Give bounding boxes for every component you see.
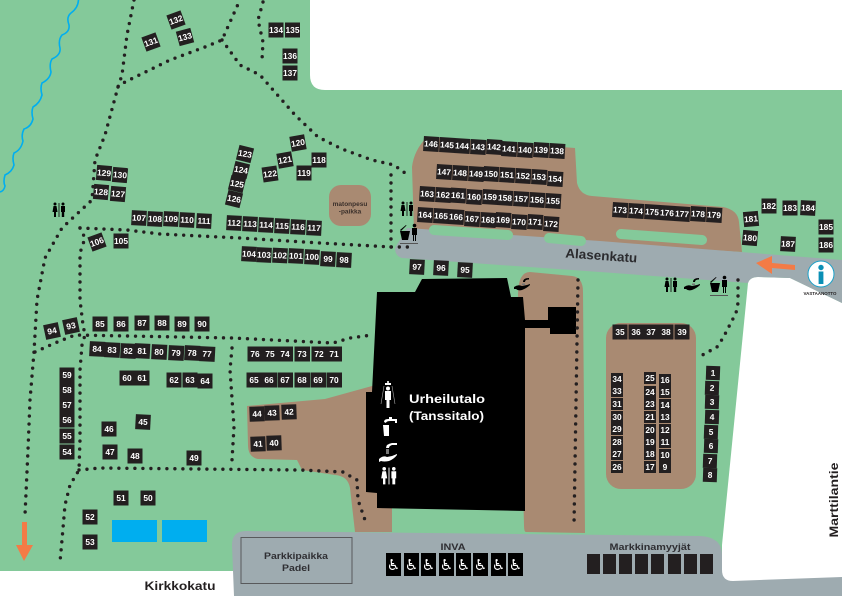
- pitches 131-133: 133: [177, 30, 193, 43]
- pitches 107-117: 111: [197, 215, 211, 226]
- pitches 155-163: 158: [498, 192, 513, 203]
- label: matonpesupaikka: -paikka: [339, 208, 362, 216]
- pitches 77-84: [89, 341, 215, 362]
- pitches 45-49: 49: [189, 453, 199, 463]
- pitches 155-163: 161: [451, 190, 466, 201]
- pitches 147-154: 153: [532, 171, 547, 182]
- brown area: west of sports hall: [247, 386, 392, 532]
- pitches 107-117: 116: [291, 221, 305, 232]
- icon: information: [808, 261, 834, 287]
- pitches 98-104: [241, 246, 352, 268]
- pitches 105-106: [87, 232, 128, 252]
- pitches 134-137: 137: [283, 68, 297, 78]
- pitches 123-126: 126: [226, 193, 242, 205]
- pitches 123-126: 125: [229, 178, 245, 190]
- pitches 131-133: 131: [143, 35, 160, 49]
- pitches 71-76: 72: [314, 349, 324, 359]
- pitches 54-59: 57: [62, 400, 72, 410]
- pitches 54-59: 56: [62, 415, 72, 425]
- pitches 98-104: 99: [323, 254, 333, 264]
- pitches 107-117: 113: [243, 218, 257, 229]
- pitches 1-8: 5: [708, 427, 714, 437]
- pitches 180-187: 183: [783, 203, 797, 213]
- pitches 26-34: 27: [612, 449, 622, 459]
- brown area: matonpesupaikka: [329, 185, 371, 226]
- box: Parkkipaikka Padel: [241, 538, 352, 584]
- pitches 147-154: [436, 164, 563, 187]
- pitches 40-44: 44: [252, 409, 262, 419]
- pitches 180-187: 186: [819, 240, 833, 250]
- icon: shower: [381, 381, 395, 408]
- pitches 180-187: [742, 198, 834, 252]
- pitches 118-122: 122: [262, 168, 278, 180]
- brown area: south-east pitches: [606, 323, 696, 489]
- pitches 26-34: 34: [612, 374, 622, 384]
- pitches 180-187: 185: [819, 222, 833, 232]
- pitches 1-8: 8: [707, 470, 713, 480]
- pitches 45-49: 47: [105, 447, 115, 457]
- pitches 147-154: 151: [500, 169, 515, 180]
- accessible parking spaces: ♿: [405, 556, 418, 574]
- pitches 107-117: 117: [307, 222, 321, 233]
- pitches 35-39: 39: [677, 327, 687, 337]
- pitches 71-76: [248, 346, 342, 362]
- pitches 54-59: 54: [62, 447, 72, 457]
- icon: toilets white: [381, 467, 396, 484]
- pitches 164-172: 165: [434, 210, 449, 221]
- pitches 98-104: 100: [305, 251, 320, 262]
- pitches 134-137: 134: [269, 25, 283, 35]
- accessible parking spaces: [386, 553, 523, 576]
- pitches 85-90: [92, 316, 210, 332]
- icon: hand washing east: [684, 278, 700, 290]
- pitches 71-76: 73: [297, 349, 307, 359]
- pitches 180-187: 184: [801, 202, 816, 213]
- pitches 26-34: 30: [612, 412, 622, 422]
- accessible parking spaces: ♿: [474, 556, 487, 574]
- pitches 138-146: 138: [550, 145, 565, 156]
- white area: top right: [310, 0, 842, 90]
- label: Kirkkokatu: Kirkkokatu: [144, 579, 216, 593]
- pitches 9-16: 9: [663, 462, 668, 472]
- pitches 50-53: 51: [116, 493, 126, 503]
- pitches 95-97: 95: [460, 265, 470, 275]
- accessible parking spaces: ♿: [492, 556, 505, 574]
- box: Parkkipaikka Padel: Padel: [282, 563, 310, 574]
- pitches 50-53: 52: [85, 512, 95, 522]
- pitches 147-154: 147: [437, 166, 452, 177]
- pitches 71-76: 76: [250, 349, 260, 359]
- pitches 35-39: 37: [646, 327, 656, 337]
- pitches 85-90: 86: [116, 319, 126, 329]
- pitches 35-39: 35: [615, 327, 625, 337]
- pitches 95-97: [409, 259, 473, 278]
- pitches 164-172: [417, 207, 559, 232]
- pitches 17-25: 19: [645, 437, 655, 447]
- pitches 173-179: 177: [675, 208, 690, 219]
- pitches 107-117: 114: [259, 219, 273, 230]
- pitches 9-16: 14: [660, 400, 670, 410]
- pitches 9-16: 13: [660, 412, 670, 422]
- pitches 147-154: 150: [484, 168, 499, 179]
- pitches 1-8: 2: [709, 383, 715, 393]
- label: vastaanotto: VASTAANOTTO: [804, 291, 837, 296]
- green islands in road edge: [434, 230, 702, 241]
- pitches 40-44: [249, 404, 297, 452]
- label: INVA: INVA: [440, 542, 466, 553]
- pitches 131-133: 132: [168, 13, 185, 27]
- pitches 40-44: 41: [253, 439, 263, 449]
- arrow: south exit: [16, 522, 33, 561]
- pitches 127-130: [93, 165, 128, 202]
- pitches 118-122: 118: [312, 155, 326, 165]
- pitches 93-94: 93: [65, 320, 77, 332]
- accessible parking spaces: ♿: [509, 556, 522, 574]
- pitches 26-34: 28: [612, 437, 622, 447]
- brown market area: north: [412, 137, 742, 252]
- pitches 60-64: 61: [137, 373, 147, 383]
- pitches 50-53: [82, 490, 156, 550]
- pitches 138-146: 146: [424, 138, 439, 149]
- road: Alasenkatu: [395, 228, 842, 303]
- pitches 60-64: [120, 370, 212, 388]
- icon: toilets east: [664, 278, 677, 292]
- pitches 45-49: 46: [104, 424, 114, 434]
- pitches 17-25: 23: [645, 399, 655, 409]
- pitches 164-172: 164: [418, 209, 433, 220]
- accessible parking spaces: ♿: [422, 556, 435, 574]
- pitches 45-49: 48: [130, 451, 140, 461]
- pitches 9-16: 11: [661, 437, 670, 447]
- pitches 77-84: 78: [187, 348, 197, 358]
- pitches 77-84: 81: [137, 346, 147, 356]
- pitches 1-8: 3: [709, 397, 715, 407]
- pitches 65-70: 70: [329, 375, 339, 385]
- pitches 164-172: 171: [528, 216, 543, 227]
- pitches 155-163: 156: [530, 194, 545, 205]
- pitches 40-44: 40: [269, 438, 279, 448]
- accessible parking spaces: ♿: [457, 556, 470, 574]
- pitches 107-117: 109: [164, 213, 179, 224]
- pitches 77-84: 83: [107, 345, 117, 355]
- pitches 123-126: 124: [233, 164, 249, 176]
- pitches 98-104: 101: [289, 250, 304, 261]
- pitches 17-25: 20: [645, 425, 655, 435]
- pitches 95-97: 96: [436, 263, 446, 273]
- pitches 107-117: 110: [180, 214, 194, 225]
- pitches 60-64: 64: [200, 376, 210, 386]
- icon: recycling point market: [400, 224, 418, 244]
- pitches 180-187: 180: [743, 232, 758, 243]
- pitches 60-64: 60: [122, 373, 132, 383]
- pitches 1-8: 7: [707, 456, 713, 466]
- pitches 60-64: 63: [185, 375, 195, 385]
- pitches 147-154: 152: [516, 170, 531, 181]
- white area: right side: [722, 277, 842, 581]
- pitches 127-130: 127: [111, 188, 126, 199]
- label: Markkinamyyjät: Markkinamyyjät: [610, 542, 691, 553]
- pitches 65-70: 65: [249, 375, 259, 385]
- pitches 164-172: 170: [512, 216, 527, 227]
- pitches 65-70: 69: [313, 375, 323, 385]
- arrow: east entrance: [756, 256, 795, 274]
- pitches 138-146: 145: [440, 139, 455, 150]
- icon: toilets market: [400, 202, 413, 216]
- pitches 164-172: 167: [465, 213, 480, 224]
- pitches 173-179: [612, 202, 722, 223]
- pitches 77-84: 80: [154, 347, 164, 357]
- accessible parking spaces: ♿: [440, 556, 453, 574]
- pitches 134-137: 135: [286, 25, 300, 35]
- pitches 138-146: 143: [471, 141, 486, 152]
- box: Parkkipaikka Padel: Parkkipaikka: [264, 551, 329, 562]
- pitches 123-126: [225, 145, 254, 208]
- pitches 77-84: 82: [123, 346, 133, 356]
- pitches 54-59: [60, 368, 74, 460]
- pitches 164-172: 169: [496, 214, 511, 225]
- pitches 173-179: 174: [629, 205, 644, 216]
- pitches 85-90: 89: [177, 319, 187, 329]
- pitches 1-8: 6: [708, 441, 714, 451]
- market vendor parking spaces: [587, 554, 713, 574]
- pitches 35-39: 38: [661, 327, 671, 337]
- pitches 138-146: 144: [455, 140, 470, 151]
- pitches 107-117: 108: [148, 213, 163, 224]
- pitches 71-76: 74: [280, 349, 290, 359]
- pitches 173-179: 173: [613, 204, 628, 215]
- pitches 107-117: 107: [132, 212, 147, 223]
- pitches 71-76: 71: [329, 349, 339, 359]
- parking area: [232, 531, 842, 596]
- pitches 85-90: 88: [157, 318, 167, 328]
- pitches 40-44: 42: [284, 407, 294, 417]
- pitches 17-25: 18: [645, 449, 655, 459]
- pitches 138-146: [423, 136, 565, 159]
- pitches 127-130: 128: [94, 186, 109, 197]
- pitches 105-106: 106: [89, 235, 106, 249]
- pitches 155-163: 160: [467, 191, 482, 202]
- pitches 173-179: 178: [691, 208, 706, 219]
- pitches 60-64: 62: [169, 375, 179, 385]
- accessible parking spaces: ♿: [387, 556, 400, 574]
- pitches 164-172: 168: [481, 214, 496, 225]
- icon: toilets west: [52, 202, 65, 217]
- pitches 9-16: 10: [660, 450, 670, 460]
- pitches 9-16: 15: [660, 387, 670, 397]
- pitches 26-34: 33: [612, 386, 622, 396]
- icon: water tap and cup: [383, 417, 397, 436]
- pitches 118-122: [262, 134, 326, 182]
- sports hall building: [366, 278, 576, 511]
- pitches 54-59: 59: [62, 370, 72, 380]
- pitches 131-133: [141, 10, 194, 52]
- pitches 54-59: 58: [62, 385, 72, 395]
- pitches 65-70: 67: [280, 375, 290, 385]
- pitches 98-104: 104: [242, 248, 257, 259]
- pitches 98-104: 102: [273, 250, 288, 261]
- pitches 85-90: 87: [137, 318, 147, 328]
- dotted footpaths: [25, 0, 738, 562]
- pitches 77-84: 77: [202, 349, 212, 359]
- pitches 1-8: 4: [709, 412, 715, 422]
- icon: hand washing north: [514, 278, 530, 290]
- label: Urheilutalo (Tanssitalo): (Tanssitalo): [409, 409, 484, 423]
- label: Urheilutalo (Tanssitalo): Urheilutalo: [409, 392, 485, 406]
- pitches 107-117: [131, 210, 322, 236]
- pitches 127-130: 130: [113, 169, 128, 180]
- pitches 17-25: 17: [645, 462, 655, 472]
- pitches 71-76: 75: [265, 349, 275, 359]
- brown area: east of sports hall: [518, 272, 585, 533]
- label: matonpesupaikka: matonpesu: [333, 201, 367, 208]
- icon: recycling point east: [710, 276, 728, 296]
- pitches 17-25: 25: [645, 373, 655, 383]
- pitches 134-137: 136: [283, 51, 297, 61]
- pitches 1-8: 1: [710, 368, 716, 378]
- pitches 65-70: 66: [264, 375, 274, 385]
- pitches 17-25: 24: [645, 387, 655, 397]
- pitches 35-39: [612, 324, 690, 340]
- pitches 17-25: 21: [645, 412, 655, 422]
- pitches 164-172: 166: [449, 211, 464, 222]
- pitches 93-94: 94: [46, 325, 58, 337]
- pitches 155-163: [419, 186, 561, 209]
- pitches 138-146: 139: [534, 144, 549, 155]
- pitches 93-94: [43, 317, 80, 340]
- swimming pools: [112, 520, 207, 542]
- pitches 105-106: 105: [114, 236, 128, 246]
- pitches 85-90: 90: [197, 319, 207, 329]
- pitches 180-187: 181: [744, 213, 759, 224]
- pitches 26-34: 29: [612, 424, 622, 434]
- pitches 118-122: 120: [290, 137, 306, 149]
- pitches 95-97: 97: [412, 262, 422, 272]
- pitches 17-25: [644, 372, 656, 473]
- pitches 98-104: 98: [339, 255, 349, 265]
- pitches 173-179: 175: [645, 206, 660, 217]
- pitches 147-154: 149: [469, 168, 484, 179]
- pitches 85-90: 85: [95, 319, 105, 329]
- pitches 77-84: 84: [92, 344, 102, 354]
- pitches 26-34: [611, 373, 623, 473]
- pitches 50-53: 50: [143, 493, 153, 503]
- pitches 98-104: 103: [257, 249, 272, 260]
- pitches 9-16: 16: [660, 375, 670, 385]
- pitches 77-84: 79: [171, 348, 181, 358]
- pitches 118-122: 121: [277, 154, 293, 166]
- white area: Kirkkokatu: [0, 571, 233, 596]
- pitches 54-59: 55: [62, 431, 72, 441]
- pitches 9-16: [659, 374, 671, 473]
- pitches 155-163: 162: [436, 189, 451, 200]
- pitches 123-126: 123: [237, 148, 253, 160]
- label: Urheilutalo (Tanssitalo): [409, 392, 485, 423]
- pitches 155-163: 159: [483, 191, 498, 202]
- pitches 45-49: [102, 414, 202, 466]
- pitches 155-163: 155: [546, 195, 561, 206]
- pitches 155-163: 163: [420, 188, 435, 199]
- pitches 173-179: 176: [660, 207, 675, 218]
- pitches 173-179: 179: [707, 209, 722, 220]
- pitches 138-146: 142: [487, 141, 502, 152]
- pitches 147-154: 148: [453, 167, 468, 178]
- label: Alasenkatu: Alasenkatu: [565, 246, 638, 266]
- pitches 45-49: 45: [138, 417, 148, 427]
- pitches 107-117: 115: [275, 220, 289, 231]
- pitches 40-44: 43: [267, 408, 277, 418]
- stream: [0, 0, 78, 192]
- pitches 147-154: 154: [548, 173, 563, 184]
- pitches 65-70: [246, 372, 342, 388]
- pitches 118-122: 119: [297, 168, 311, 178]
- pitches 26-34: 26: [612, 462, 622, 472]
- pitches 1-8: [703, 366, 720, 482]
- pitches 35-39: 36: [631, 327, 641, 337]
- pitches 134-137: [268, 22, 300, 80]
- label: Marttilantie: Marttilantie: [827, 462, 841, 538]
- pitches 164-172: 172: [544, 218, 559, 229]
- pitches 50-53: 53: [85, 537, 95, 547]
- icon: hand wash: [379, 443, 397, 462]
- pitches 138-146: 140: [518, 144, 533, 155]
- pitches 26-34: 31: [612, 399, 622, 409]
- pitches 107-117: 112: [227, 217, 241, 228]
- pitches 138-146: 141: [502, 143, 517, 154]
- pitches 180-187: 182: [762, 201, 776, 211]
- pitches 180-187: 187: [781, 238, 796, 249]
- pitches 127-130: 129: [97, 167, 112, 178]
- pitches 155-163: 157: [514, 193, 529, 204]
- pitches 65-70: 68: [297, 375, 307, 385]
- pitches 9-16: 12: [660, 425, 670, 435]
